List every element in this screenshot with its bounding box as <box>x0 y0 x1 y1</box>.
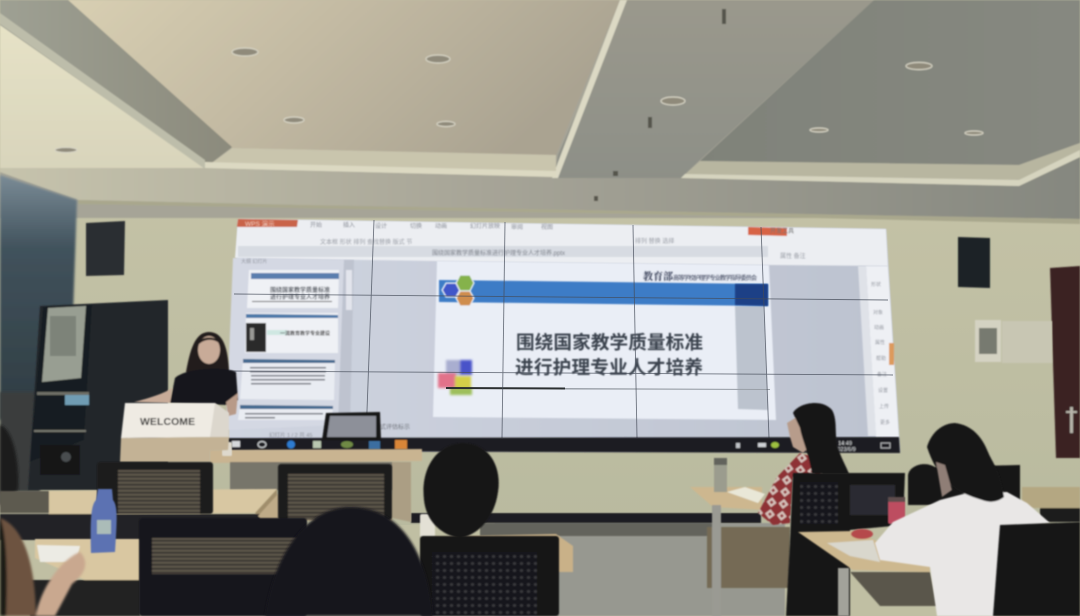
ceiling: lower strip <box>0 157 1080 219</box>
table top <box>690 487 762 510</box>
left thumbnail pane: 幻灯片 1 / 2 共 45 <box>269 431 312 439</box>
ceiling: lit left section <box>0 25 205 168</box>
notebook <box>727 487 765 503</box>
face <box>787 415 812 453</box>
ceiling sprinklers <box>594 9 726 201</box>
table leg <box>838 568 849 616</box>
front-row chair centre <box>139 518 307 616</box>
seated woman centre <box>423 443 499 538</box>
back-row desk left <box>0 489 392 540</box>
floor shadow band <box>480 523 720 536</box>
black chair at table <box>786 473 905 616</box>
ribbon labels: 视图 <box>541 223 553 231</box>
ceiling: right soffit band <box>681 143 1080 186</box>
thumbnail 2 <box>245 313 338 353</box>
hair <box>927 423 1004 502</box>
left seated person <box>0 518 85 616</box>
table leg <box>712 505 721 616</box>
slide organisation name <box>643 270 757 283</box>
ribbon labels <box>245 219 806 260</box>
ribbon labels: 开发工具 <box>770 227 794 235</box>
table top <box>798 531 930 572</box>
water flask <box>714 458 727 492</box>
desk by centre <box>425 534 573 572</box>
presenter face <box>198 336 220 364</box>
hair <box>423 443 499 538</box>
ribbon labels: 开始 <box>310 221 322 229</box>
ribbon labels: 动画 <box>435 223 447 230</box>
thumbnail 4 <box>238 405 333 420</box>
wall panel <box>975 320 1052 363</box>
slide title <box>515 332 703 378</box>
LED screen <box>226 219 900 453</box>
centre chair <box>420 536 559 616</box>
ribbon labels: 切换 <box>410 222 422 230</box>
monitor <box>322 412 381 440</box>
lower shelf <box>707 527 790 588</box>
right side toolbar: 属性 <box>875 339 885 346</box>
status text: CPMM/式评估标示 <box>360 423 410 431</box>
presenter arms <box>134 388 172 403</box>
foreground woman head <box>265 507 433 616</box>
ceiling lights <box>55 48 983 153</box>
speaker right <box>958 237 990 288</box>
right side toolbar: 设置 <box>878 387 888 394</box>
presenter torso <box>170 369 238 405</box>
ceiling <box>0 0 1080 224</box>
right side toolbar: 对象 <box>873 309 883 316</box>
right side toolbar: 备注 <box>877 371 887 378</box>
cup on desk <box>420 514 435 537</box>
thumbnail 1: 进行护理专业人才培养 <box>270 293 330 301</box>
speaker left <box>86 221 125 276</box>
wall <box>0 190 1080 525</box>
right door <box>1050 266 1080 458</box>
ceiling: right recess panel <box>700 0 1080 165</box>
screen base <box>228 219 900 452</box>
thumbnail 1 <box>247 270 339 308</box>
ribbon labels: 插入 <box>343 221 355 229</box>
slide title: 围绕国家教学质量标准 <box>516 332 703 353</box>
ceiling: left soffit band <box>205 148 556 177</box>
front table <box>210 449 422 522</box>
taskbar: 2023/6/9 <box>834 447 856 453</box>
front-row desk left <box>30 539 140 616</box>
taskbar: 14:49 <box>838 441 852 447</box>
ceiling: beam light edge <box>0 13 205 169</box>
slide organisation name: 高等学校护理学专业教学指导委员会 <box>673 274 757 282</box>
ribbon labels: 幻灯片放映 <box>470 222 500 230</box>
ribbon labels: 设计 <box>375 222 387 230</box>
shelf <box>850 572 937 606</box>
right side toolbar: 形状 <box>871 281 881 288</box>
right side toolbar: 帮助 <box>876 355 886 362</box>
slide title: 进行护理专业人才培养 <box>515 357 703 378</box>
right student table two <box>798 529 937 616</box>
floor <box>495 523 785 616</box>
podium with welcome sign <box>120 403 229 462</box>
ceiling: recess panel left <box>68 0 620 155</box>
slide hexagon logo <box>442 275 474 306</box>
ribbon labels: 审阅 <box>511 223 523 231</box>
ceiling: white edge <box>552 0 627 178</box>
student woman left <box>758 403 849 525</box>
pink tumbler <box>888 497 905 524</box>
paper <box>827 540 880 562</box>
presenter <box>134 332 238 416</box>
equipment rack <box>28 300 168 490</box>
thumbnail 1: 围绕国家教学质量标准 <box>270 286 330 294</box>
slide organisation name: 教育部 <box>643 270 673 283</box>
presenter hair <box>186 332 229 372</box>
right side toolbar: 动画 <box>874 324 884 331</box>
cup on front table <box>222 442 232 456</box>
slide header dark end <box>735 284 768 306</box>
hair <box>793 403 849 474</box>
thumbnail 3 <box>240 359 335 400</box>
wall top shadow <box>78 200 1080 224</box>
white-shirted student <box>875 423 1050 616</box>
right side toolbar <box>858 266 899 438</box>
back-row chair two <box>278 464 392 520</box>
chair behind right student <box>908 464 1020 505</box>
left curtain <box>0 175 77 420</box>
shirt <box>875 492 1050 616</box>
baseboard <box>411 513 761 523</box>
foreground chair right <box>993 522 1080 616</box>
lower-left dark wall area <box>0 392 40 492</box>
right student table one <box>690 487 790 616</box>
ribbon labels: 排列 替换 选择 <box>635 237 674 245</box>
thumbnail 2: 一流教育教学专业建设 <box>280 330 330 337</box>
ribbon labels: 文本框 形状 排列 查找替换 版式 节 <box>320 238 412 246</box>
blouse <box>758 453 822 525</box>
slide colour-block logo <box>438 360 472 395</box>
slide header band <box>439 280 768 306</box>
ribbon labels: WPS 演示 <box>245 219 275 228</box>
ribbon labels: 属性 备注 <box>780 252 806 260</box>
ribbon labels: 围绕国家教学质量标准进行护理专业人才培养.pptx <box>432 249 565 257</box>
slide grey side column <box>735 306 768 410</box>
right side toolbar: 上传 <box>879 403 889 410</box>
ceiling: dark diagonal beam <box>0 0 232 168</box>
podium with welcome sign: WELCOME <box>140 417 195 428</box>
right side toolbar: 更多 <box>880 419 890 426</box>
neck <box>936 462 952 497</box>
left thumbnail pane <box>226 258 354 439</box>
back-row chair one <box>97 462 213 514</box>
screen seams <box>230 220 893 438</box>
person far left edge <box>0 425 18 506</box>
ribbon <box>235 219 888 266</box>
water bottle <box>91 489 117 553</box>
left thumbnail pane: 大纲 幻灯片 <box>241 258 267 265</box>
slide <box>433 261 776 420</box>
slide rule <box>446 387 565 390</box>
far right desk <box>1022 487 1080 522</box>
taskbar <box>228 437 900 453</box>
red object <box>851 529 873 539</box>
ceiling: centre beam <box>554 0 874 178</box>
